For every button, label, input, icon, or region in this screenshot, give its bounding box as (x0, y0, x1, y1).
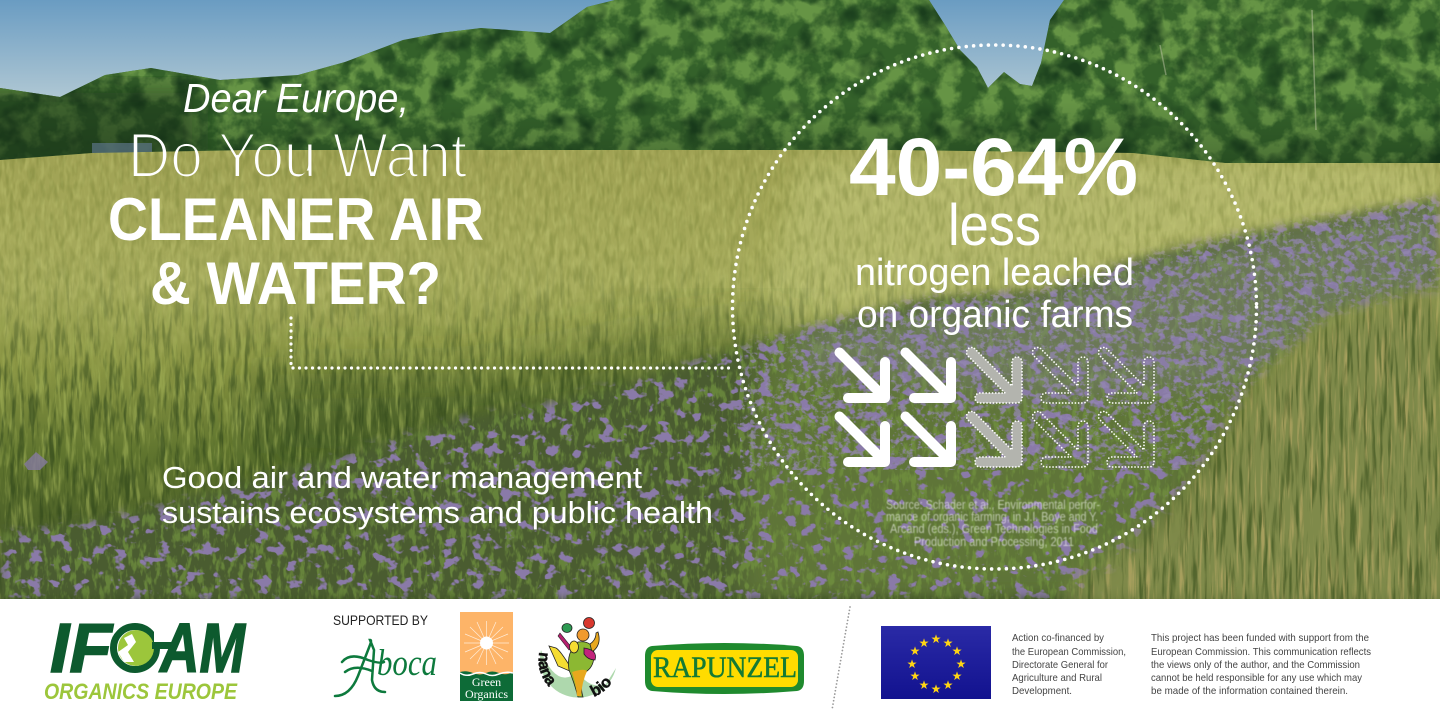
footer band (0, 599, 1440, 720)
logo: IFOAM Organics Europe: IF (50, 609, 114, 687)
EU co-financing note (1012, 632, 1126, 697)
footer dotted divider (832, 607, 850, 710)
headline (108, 75, 484, 317)
EU flag: ★ (931, 682, 941, 696)
EU flag: ★ (910, 669, 920, 683)
EU co-financing note: the European Commission, (1012, 646, 1126, 658)
EU disclaimer: be made of the information contained therein. (1151, 685, 1348, 697)
logo: Rapunzel (645, 643, 804, 694)
EU disclaimer: This project has been funded with support from the (1151, 632, 1369, 644)
logo: IFOAM Organics Europe: ORGANICS EUROPE (44, 679, 238, 704)
EU flag: ★ (910, 644, 920, 658)
EU flag: ★ (952, 669, 962, 683)
tall grass bottom right (1040, 270, 1440, 600)
heading line: Dear Europe: Dear Europe, (183, 75, 409, 121)
caption line 2: on organic farms (857, 294, 1133, 336)
source note: mance of organic farming, in J.I. Boye and Y. (886, 510, 1098, 524)
source note: Arcand (eds.), Green Technologies in Food (890, 522, 1098, 536)
heading line: & WATER?: & WATER? (150, 250, 441, 317)
logo: nana bio: bio (589, 678, 611, 697)
body text: sustains ecosystems and public health (162, 495, 713, 530)
heading line: Do You Want: Do You Want (128, 121, 467, 191)
source note: Source: Schader et al., Environmental perfor- (886, 498, 1100, 512)
EU flag: ★ (907, 657, 917, 671)
caption line 1: nitrogen leached (855, 252, 1134, 294)
EU co-financing note: Agriculture and Rural (1012, 672, 1102, 684)
EU flag: ★ (943, 678, 953, 692)
logo: Rapunzel: RAPUNZEL (653, 651, 797, 684)
statistic: 40-64% less nitrogen leached (849, 122, 1138, 336)
logo: Green Organics (460, 612, 513, 701)
EU flag: ★ (919, 678, 929, 692)
heading line: CLEANER AIR: CLEANER AIR (108, 186, 484, 253)
EU disclaimer: the views only of the author, and the Commission (1151, 659, 1360, 671)
EU disclaimer (1151, 632, 1371, 697)
EU co-financing note: Directorate General for (1012, 659, 1108, 671)
logo: nana bio: nana (538, 652, 554, 688)
label: supported by: SUPPORTED BY (333, 612, 429, 628)
logo: Green Organics: Organics (465, 687, 508, 701)
logo: nana bio (538, 617, 616, 698)
source note (886, 498, 1100, 549)
EU co-financing note: Action co-financed by (1012, 632, 1105, 644)
body text: Good air and water management (162, 460, 642, 495)
EU co-financing note: Development. (1012, 685, 1072, 697)
flower strip (0, 190, 1440, 600)
EU disclaimer: European Commission. This communication reflects (1151, 646, 1371, 658)
dotted circle (732, 45, 1256, 569)
EU disclaimer: cannot be held responsible for any use which may (1151, 672, 1363, 684)
number: 40-64% (849, 122, 1138, 213)
EU flag: ★ (952, 644, 962, 658)
logo: Aboca (335, 640, 437, 696)
EU flag: ★ (956, 657, 966, 671)
logo: Green Organics: Green (472, 675, 501, 689)
source note: Production and Processing, 2011 (914, 535, 1074, 549)
body text (162, 460, 713, 530)
logo: IFOAM Organics Europe: AM (158, 609, 246, 687)
EU flag: ★ (931, 632, 941, 646)
tree line (0, 0, 1440, 175)
EU flag (881, 626, 991, 699)
logo: IFOAM Organics Europe (44, 609, 246, 704)
logo: Aboca: boca (377, 643, 437, 684)
word: less: less (948, 193, 1041, 258)
EU flag: ★ (919, 636, 929, 650)
wheat field (0, 150, 1440, 600)
arrow pictogram: 10 arrows (834, 348, 1154, 467)
EU flag: ★ (943, 636, 953, 650)
dotted connector from headline to circle (291, 318, 735, 368)
